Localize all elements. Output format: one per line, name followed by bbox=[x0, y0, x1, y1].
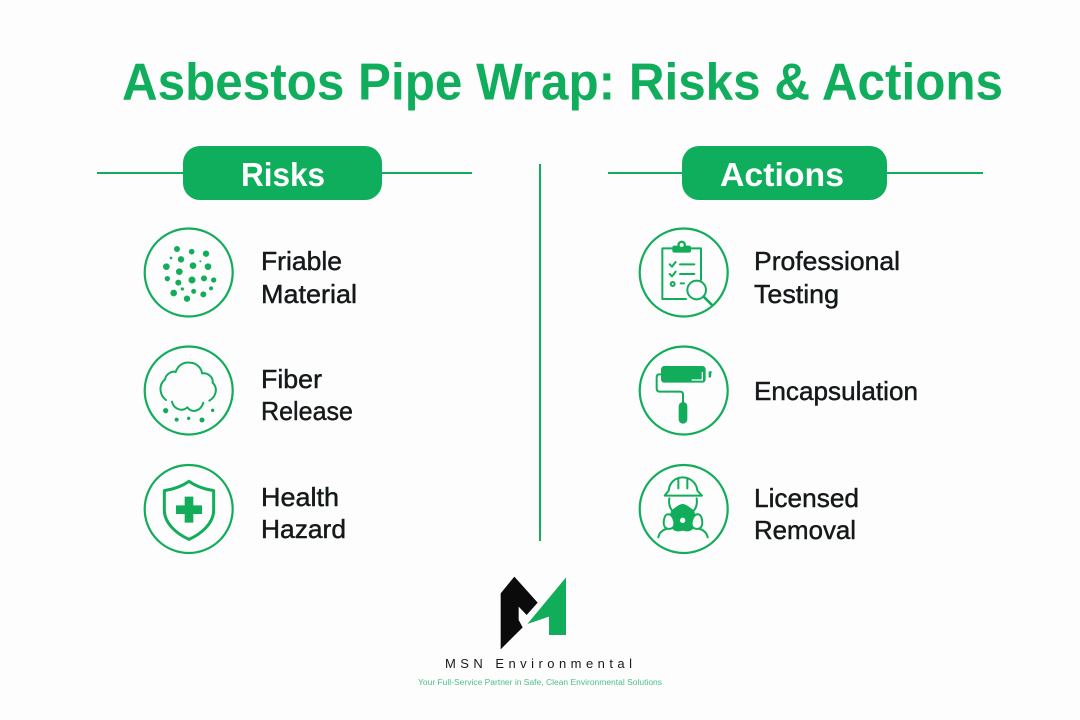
tagline: Your Full-Service Partner in Safe, Clean Environmental Solutions bbox=[418, 678, 662, 687]
label: licensed removal: Licensed bbox=[754, 483, 859, 513]
risk: health hazard bbox=[145, 465, 346, 553]
label: health hazard bbox=[261, 482, 346, 544]
heading: actions: Actions bbox=[720, 156, 844, 193]
risk: fiber release bbox=[145, 346, 353, 434]
label: licensed removal: Removal bbox=[754, 515, 856, 545]
label: health hazard: Hazard bbox=[261, 514, 346, 544]
risk: friable material bbox=[145, 228, 357, 316]
label: fiber release: Fiber bbox=[261, 364, 322, 394]
label: encapsulation: Encapsulation bbox=[754, 376, 918, 406]
label: fiber release bbox=[261, 364, 353, 426]
label: professional testing: Testing bbox=[754, 279, 839, 309]
heading: risks: Risks bbox=[241, 156, 325, 193]
icon: shield with cross bbox=[164, 481, 214, 539]
label: professional testing bbox=[754, 246, 900, 309]
icon: clipboard and magnifier bbox=[662, 241, 712, 305]
icon: paint roller bbox=[657, 366, 712, 424]
heading: risks bbox=[97, 146, 472, 200]
title: Asbestos Pipe Wrap: Risks & Actions bbox=[122, 54, 1003, 112]
action: professional testing bbox=[640, 228, 900, 316]
label: professional testing: Professional bbox=[754, 246, 900, 276]
label: health hazard: Health bbox=[261, 482, 339, 512]
label: licensed removal bbox=[754, 483, 859, 545]
center divider bbox=[539, 164, 541, 541]
action: encapsulation bbox=[640, 346, 918, 434]
icon: worker with respirator bbox=[658, 477, 708, 537]
label: fiber release: Release bbox=[261, 396, 353, 426]
action: licensed removal bbox=[640, 465, 859, 553]
panel: actions bbox=[608, 146, 983, 553]
label: friable material: Friable bbox=[261, 246, 342, 276]
heading: actions bbox=[608, 146, 983, 200]
logo mark bbox=[501, 577, 566, 649]
icon: friable particles bbox=[163, 246, 216, 302]
icon: cloud with fibers bbox=[160, 363, 216, 422]
company name: MSN Environmental bbox=[445, 656, 632, 671]
panel: risks bbox=[97, 146, 472, 553]
label: friable material: Material bbox=[261, 279, 357, 309]
label: friable material bbox=[261, 246, 357, 309]
logo: MSN Environmental bbox=[418, 577, 662, 687]
